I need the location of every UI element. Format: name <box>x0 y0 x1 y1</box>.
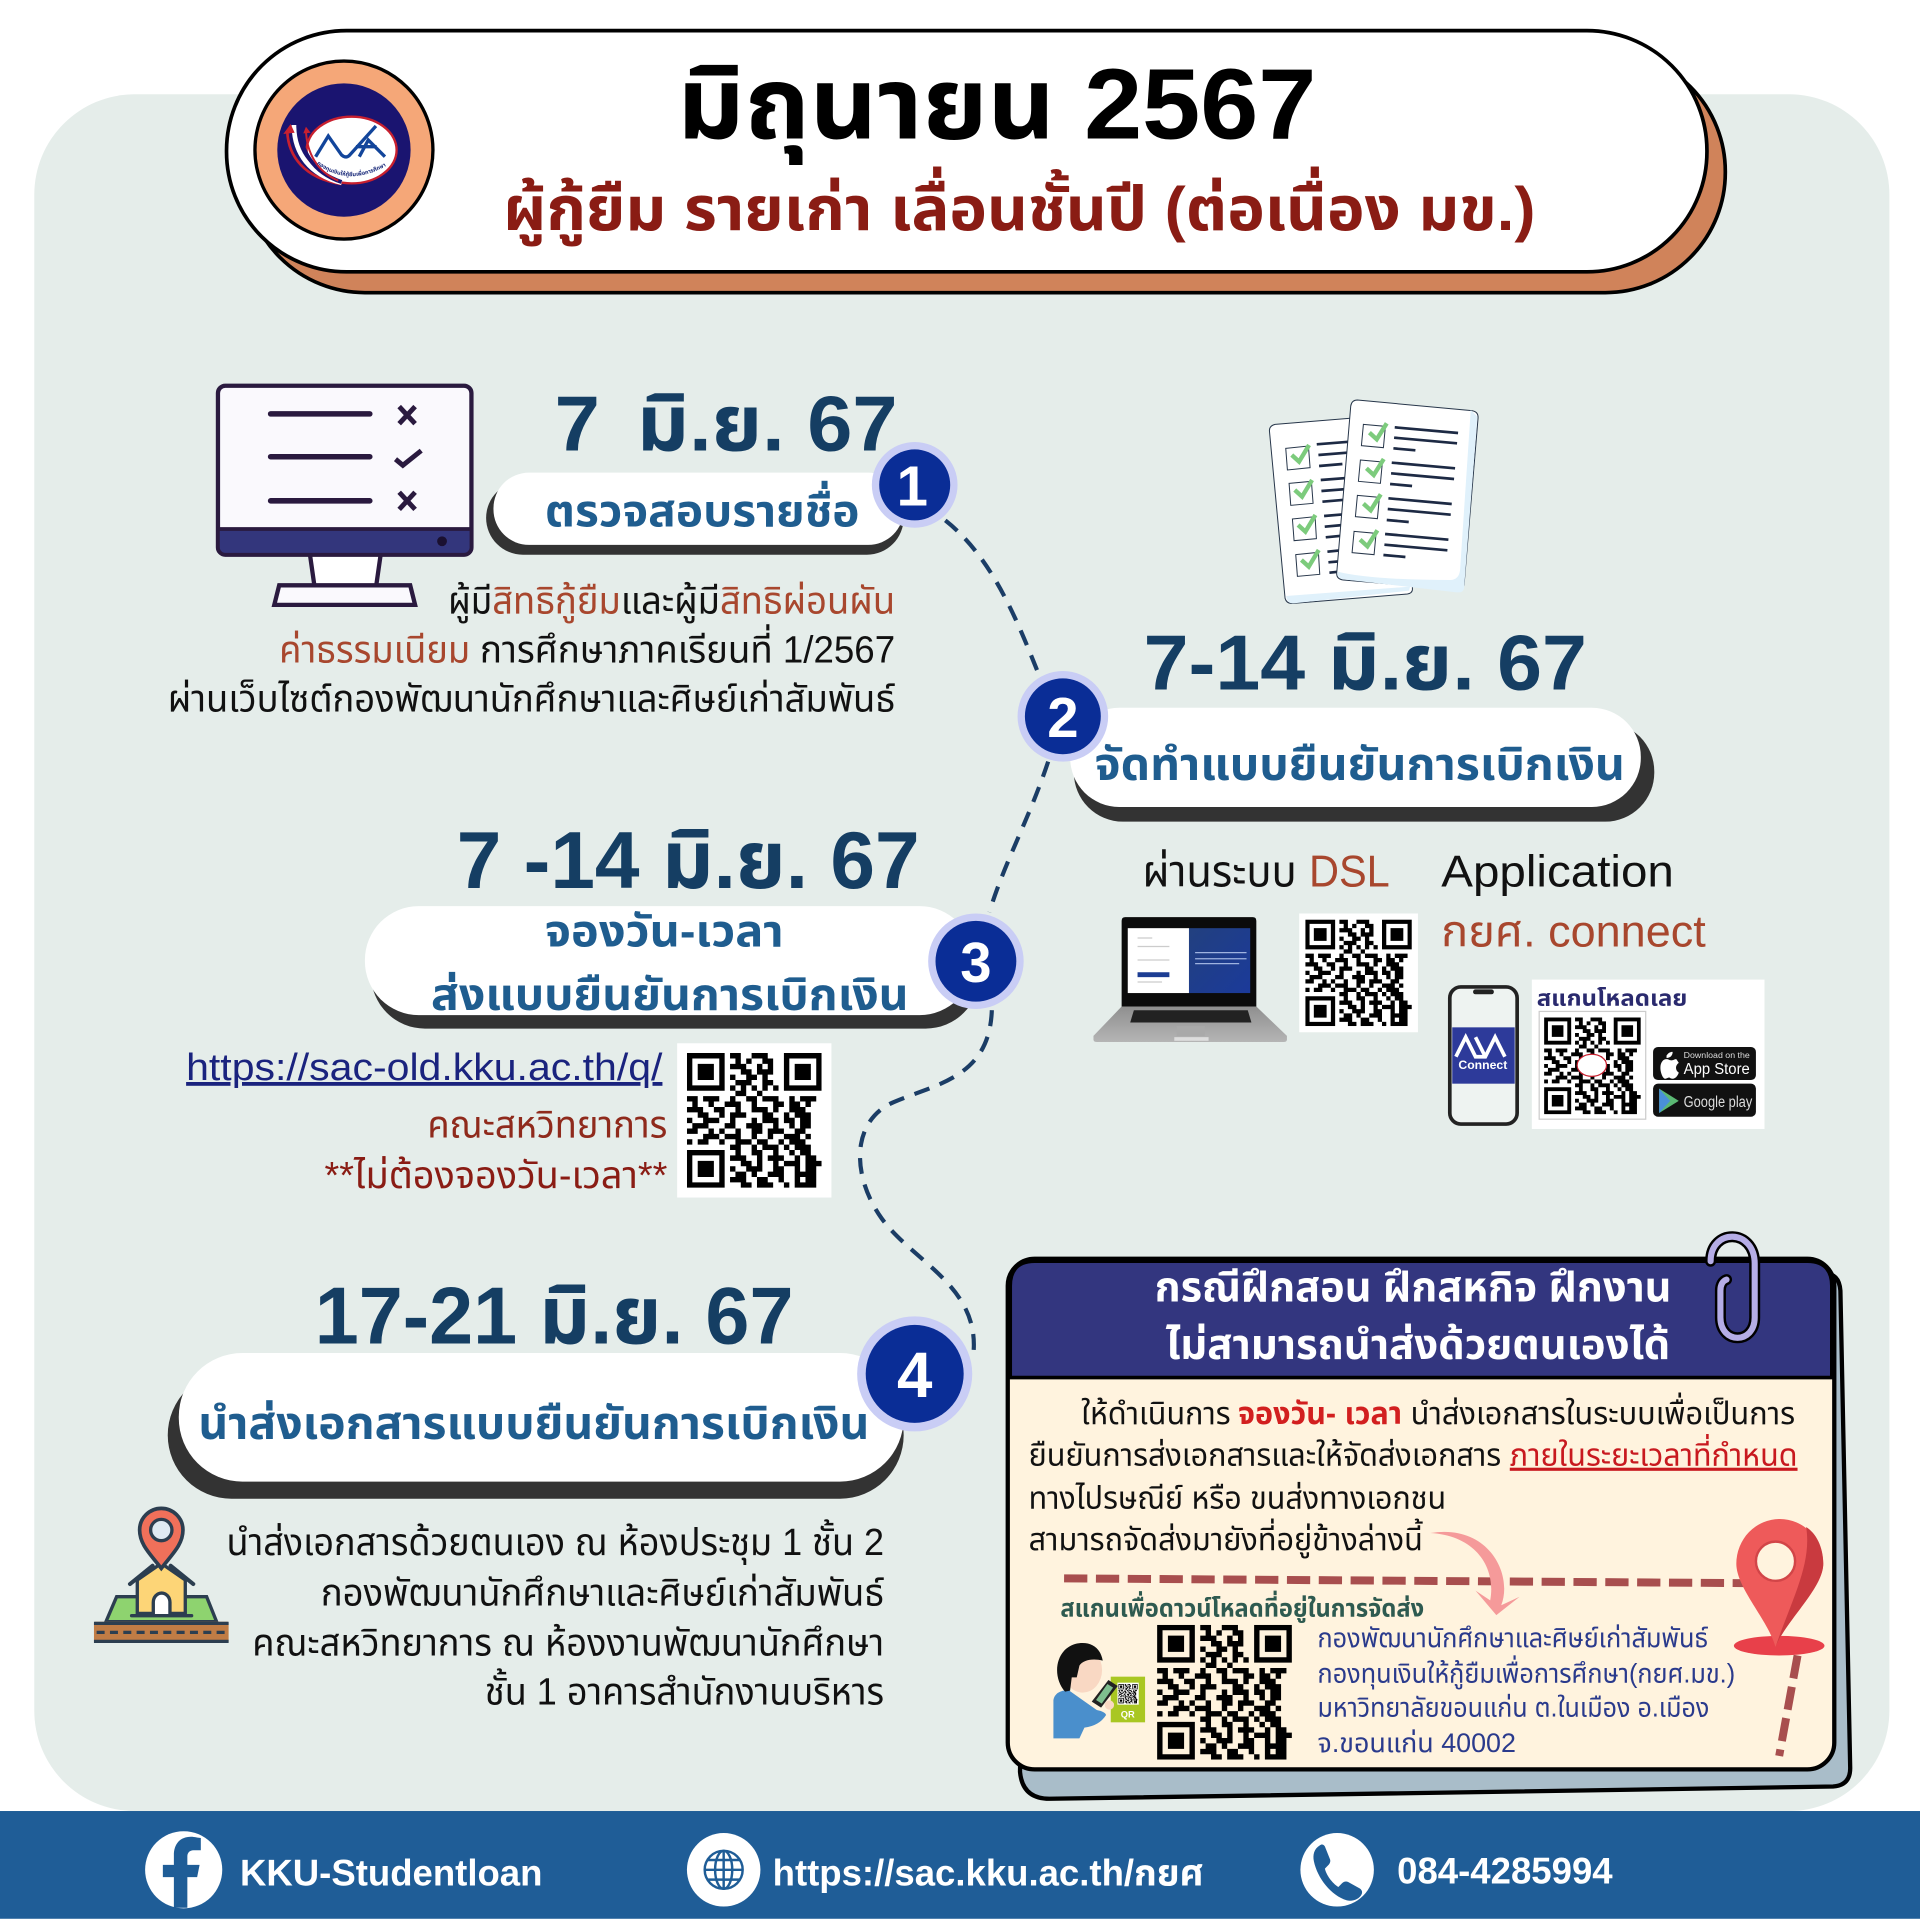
icon: laptop <box>1093 917 1287 1042</box>
pill label: จองวัน-เวลา <box>545 908 784 957</box>
banner body <box>227 31 1707 272</box>
card body text: นำส่งเอกสารในระบบเพื่อเป็นการ <box>1411 1392 1795 1431</box>
number badge <box>857 1316 972 1431</box>
text: step 4 description: คณะสหวิทยาการ ณ ห้องงานพัฒนานักศึกษา <box>252 1623 884 1665</box>
facebook label: KKU-Studentloan <box>240 1853 542 1894</box>
text: step 4 description: ชั้น 1 อาคารสำนักงานบริหาร <box>485 1668 884 1713</box>
pill shadow <box>486 481 904 555</box>
website label: https://sac.kku.ac.th/กยศ <box>773 1853 1204 1894</box>
card body text: จองวัน- เวลา <box>1238 1396 1402 1431</box>
text: step 1 description: ผู้มี <box>448 580 492 623</box>
icon: house with pin <box>94 1508 229 1643</box>
banner shadow <box>245 51 1725 293</box>
date: 7 <box>555 380 600 468</box>
scan caption: สแกนเพื่อดาวน์โหลดที่อยู่ในการจัดส่ง <box>1060 1590 1424 1623</box>
pill <box>365 906 973 1015</box>
text: step 4 description: นำส่งเอกสารด้วยตนเอง ณ ห้องประชุม 1 ชั้น 2 <box>227 1518 884 1565</box>
text: via DSL <box>1142 848 1390 897</box>
text: step 1 description: ค่าธรรมเนียม <box>279 629 470 671</box>
icon: loan fund logo: กองทุนเงินให้กู้ยืมเพื่อการศึกษา <box>317 162 386 178</box>
dashed timeline path <box>860 520 1048 1353</box>
qr code: booking <box>677 1043 831 1198</box>
text: step 4 description: กองพัฒนานักศึกษาและศิษย์เก่าสัมพันธ์ <box>321 1572 884 1614</box>
delivery address: จ.ขอนแก่น 40002 <box>1318 1728 1516 1758</box>
pill shadow <box>168 1371 904 1499</box>
date: 7-14 มิ.ย. 67 <box>1144 618 1587 706</box>
pill label: ตรวจสอบรายชื่อ <box>545 481 860 537</box>
icon: facebook <box>145 1831 222 1908</box>
text: booking link: **ไม่ต้องจองวัน-เวลา** <box>324 1155 668 1197</box>
date: มิ.ย. 67 <box>637 380 898 468</box>
number badge: 4 <box>897 1340 933 1411</box>
pill label: จัดทำแบบยืนยันการเบิกเงิน <box>1095 739 1625 790</box>
number badge <box>928 913 1024 1009</box>
text: step 1 description: การศึกษาภาคเรียนที่ 1/2567 <box>480 623 895 671</box>
icon: red location pin <box>1734 1519 1824 1656</box>
text: application name: Application <box>1441 848 1674 897</box>
text: step 1 description: สิทธิผ่อนผัน <box>720 580 895 622</box>
text: via DSL: DSL <box>1309 848 1390 897</box>
header banner <box>224 28 1728 294</box>
text: booking link: https://sac-old.kku.ac.th/q/ <box>186 1047 663 1089</box>
text: step 1 description <box>168 580 895 720</box>
card body text: ทางไปรษณีย์ หรือ ขนส่งทางเอกชน <box>1029 1481 1446 1516</box>
number badge: 1 <box>897 455 928 518</box>
delivery address: มหาวิทยาลัยขอนแก่น ต.ในเมือง อ.เมือง <box>1318 1693 1709 1723</box>
step 4 <box>168 1271 972 1499</box>
icon: paper clip <box>1711 1237 1755 1338</box>
date: 17-21 มิ.ย. 67 <box>315 1271 793 1361</box>
icon: globe <box>687 1833 760 1907</box>
qr code: address <box>1157 1625 1292 1760</box>
card body text <box>1029 1392 1798 1559</box>
icon: phone <box>1300 1833 1374 1907</box>
qr code: app <box>1539 1011 1646 1119</box>
pill shadow <box>371 921 980 1029</box>
pill label <box>431 908 909 1020</box>
text: booking link: คณะสหวิทยาการ <box>427 1105 667 1147</box>
pill <box>493 473 904 545</box>
text: step 1 description: ผ่านเว็บไซต์กองพัฒนานักศึกษาและศิษย์เก่าสัมพันธ์ <box>168 678 895 720</box>
number badge: 2 <box>1047 686 1079 749</box>
icon: computer monitor checklist <box>218 386 471 605</box>
app store badge: Download on the <box>1684 1050 1750 1060</box>
pill <box>179 1353 904 1482</box>
footer bar <box>0 1811 1920 1919</box>
icon: phone with connect app <box>1450 987 1517 1124</box>
number badge <box>1018 671 1108 762</box>
card heading: สแกนโหลดเลย <box>1537 985 1687 1010</box>
pill label: ส่งแบบยืนยันการเบิกเงิน <box>431 971 909 1020</box>
card body text: ให้ดำเนินการ <box>1081 1396 1231 1431</box>
qr code: DSL <box>1299 913 1418 1032</box>
arrow: pink curved <box>1430 1532 1520 1615</box>
title: มิถุนายน 2567 <box>677 48 1316 164</box>
step 2 <box>1018 618 1654 822</box>
pill <box>1070 708 1641 807</box>
number badge <box>872 442 958 528</box>
app store badge <box>1653 1047 1756 1080</box>
delivery address <box>1318 1623 1735 1758</box>
delivery address: กองทุนเงินให้กู้ยืมเพื่อการศึกษา(กยศ.มข.) <box>1318 1654 1735 1689</box>
text: step 4 description <box>227 1518 884 1713</box>
app download card <box>1532 980 1764 1129</box>
delivery route dashes <box>1064 1578 1798 1756</box>
icon: person scanning qr: QR <box>1121 1709 1135 1719</box>
text: via DSL: ผ่านระบบ <box>1142 848 1297 897</box>
text: application name <box>1441 848 1706 957</box>
card body text: สามารถจัดส่งมายังที่อยู่ข้างล่างนี้ <box>1029 1518 1423 1559</box>
card back sheet <box>1020 1273 1850 1799</box>
date: 7 -14 มิ.ย. 67 <box>457 816 920 906</box>
number badge: 3 <box>960 931 992 994</box>
pill shadow <box>1074 722 1654 822</box>
card header: กรณีฝึกสอน ฝึกสหกิจ ฝึกงาน <box>1155 1264 1671 1311</box>
google play badge: Google play <box>1684 1094 1752 1111</box>
icon: checklist documents <box>1269 400 1478 603</box>
card body <box>1008 1259 1834 1769</box>
pill label: นำส่งเอกสารแบบยืนยันการเบิกเงิน <box>198 1398 869 1449</box>
delivery address: กองพัฒนานักศึกษาและศิษย์เก่าสัมพันธ์ <box>1318 1623 1709 1653</box>
step 3 <box>365 816 1024 1029</box>
step 1 <box>486 380 958 555</box>
panel: internship notice card <box>1008 1237 1850 1799</box>
google play badge <box>1653 1084 1756 1117</box>
text: booking link <box>186 1047 668 1197</box>
card body text: ยืนยันการส่งเอกสารและให้จัดส่งเอกสาร <box>1029 1438 1501 1473</box>
text: application name: กยศ. connect <box>1441 908 1706 957</box>
card header: ไม่สามารถนำส่งด้วยตนเองได้ <box>1166 1321 1670 1368</box>
app store badge: App Store <box>1684 1061 1750 1078</box>
icon: loan fund logo <box>253 59 435 241</box>
card header <box>1010 1261 1832 1378</box>
text: step 1 description: สิทธิกู้ยืม <box>492 580 621 623</box>
icon: phone with connect app: Connect <box>1458 1058 1507 1072</box>
card body text: ภายในระยะเวลาที่กำหนด <box>1510 1434 1798 1473</box>
icon: person scanning qr <box>1053 1643 1145 1738</box>
phone number: 084-4285994 <box>1397 1850 1613 1891</box>
subtitle: ผู้กู้ยืม รายเก่า เลื่อนชั้นปี (ต่อเนื่อง มข.) <box>503 166 1536 246</box>
text: step 1 description: และผู้มี <box>621 580 720 623</box>
